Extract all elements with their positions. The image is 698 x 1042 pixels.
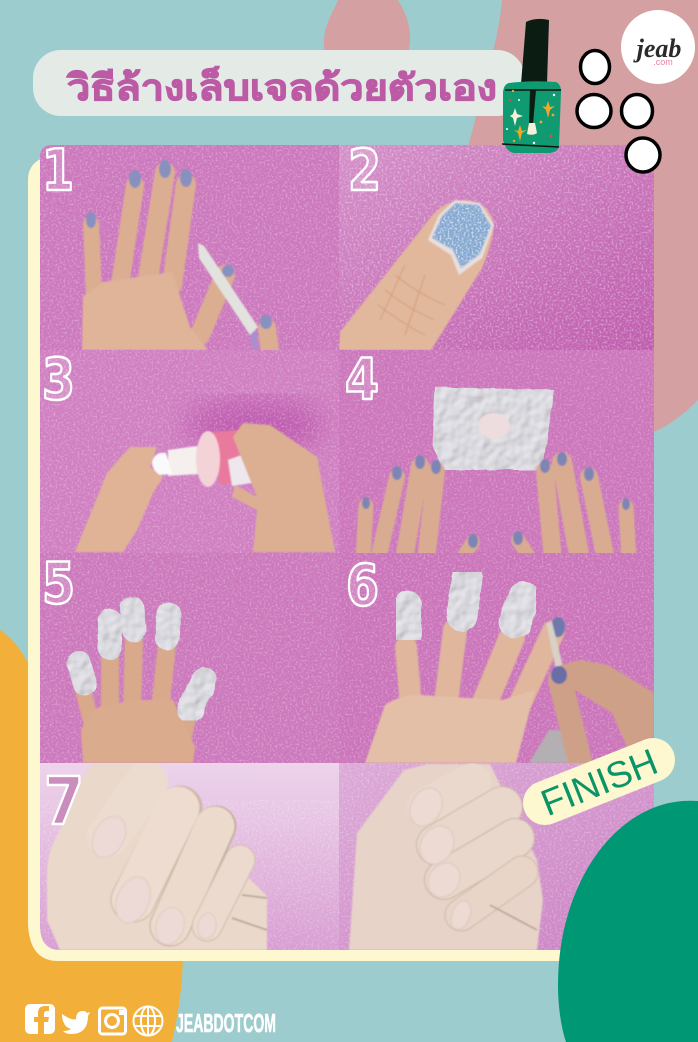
logo suffix: .com — [653, 57, 673, 67]
panel: step 6 remove foil and scrape — [339, 553, 654, 770]
site name: JEABDOTCOM — [176, 1008, 276, 1038]
title pill — [33, 50, 525, 116]
panel: step 7 clean nails, hand view one — [40, 763, 339, 950]
cream frame — [28, 155, 600, 961]
number 7: 7 — [44, 763, 84, 840]
title: วิธีล้างเล็บเจลด้วยตัวเอง — [66, 65, 497, 108]
icon: globe — [134, 1006, 162, 1036]
number 6: 6 — [346, 553, 379, 619]
finish label: FINISH — [535, 741, 663, 824]
shape: rose panel top right — [455, 0, 698, 432]
footer social icons — [25, 1004, 276, 1038]
number 4: 4 — [345, 347, 379, 413]
panel: step 1 file the nails — [40, 145, 339, 360]
panel: step 8 clean nails, hand view two — [339, 763, 654, 950]
shape: green corner — [558, 801, 698, 1042]
number 1: 1 — [42, 138, 74, 204]
icon: nail polish bottle — [502, 19, 561, 153]
icon: instagram — [100, 1008, 126, 1034]
panel: step 2 close-up of nail — [339, 145, 654, 350]
badge: finish — [535, 741, 663, 824]
logo: jeab.com — [621, 10, 695, 84]
number 2: 2 — [348, 138, 381, 204]
shape: orange corner — [0, 630, 183, 1042]
number 3: 3 — [42, 347, 75, 413]
icon: facebook — [25, 1004, 55, 1034]
step numbers — [42, 138, 381, 840]
icon: twitter — [62, 1011, 90, 1034]
decorative dots — [577, 50, 660, 172]
logo word: jeab — [633, 34, 681, 63]
shape: rose blob top — [324, 0, 410, 80]
panel: step 3 apply remover — [40, 350, 339, 553]
panel: step 4 foil sheet — [339, 350, 654, 560]
number 5: 5 — [42, 551, 75, 617]
photo grid — [40, 145, 654, 950]
panel: step 5 fingers wrapped in foil — [40, 553, 339, 763]
